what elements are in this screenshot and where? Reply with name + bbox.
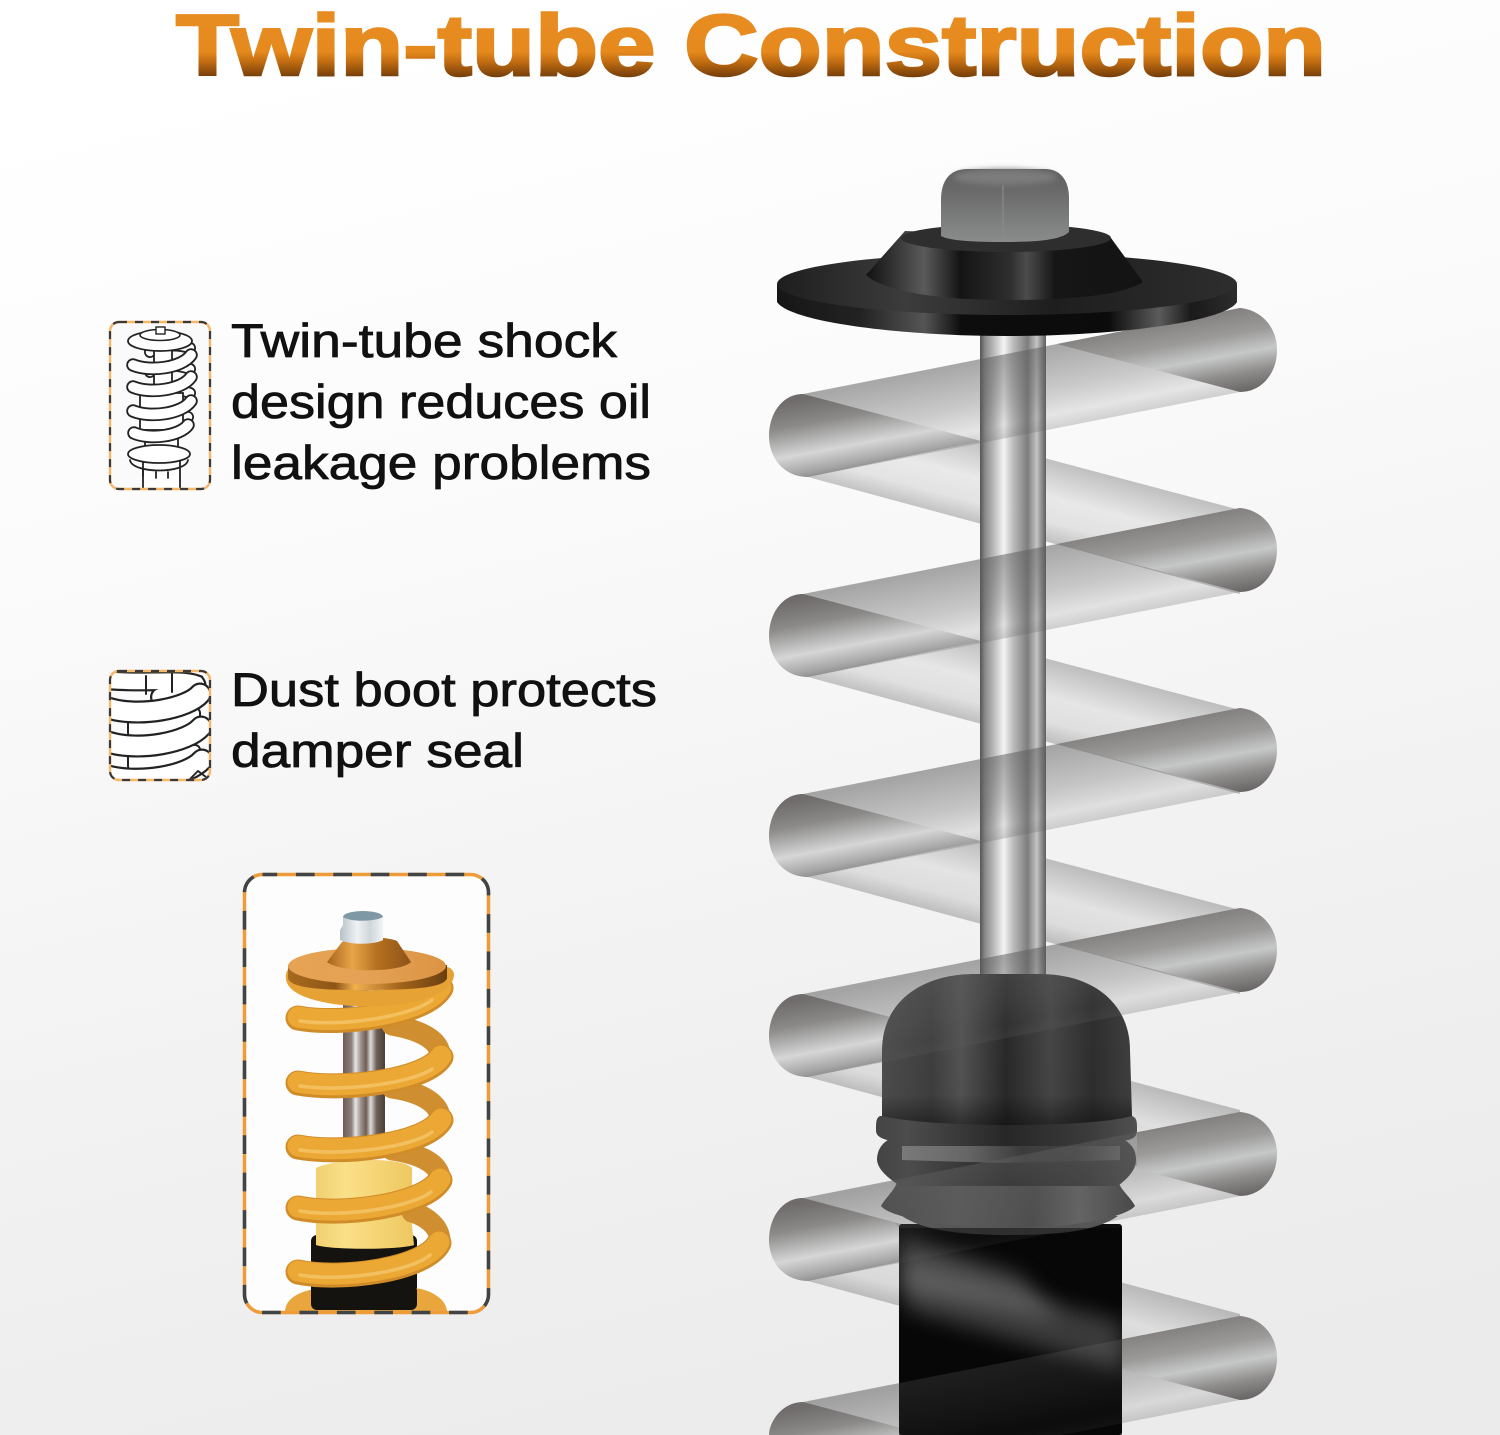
- boot upper ring: [876, 1116, 1137, 1146]
- spring: rear coil bands: [803, 394, 1240, 1435]
- chrome piston rod: [343, 990, 385, 1138]
- light groove: [902, 1146, 1120, 1163]
- text: twin-tube shock design: Twin-tube shock: [231, 314, 618, 367]
- main shock diagram: [769, 169, 1277, 1435]
- yellow bump stop: [316, 1160, 414, 1249]
- text: dust boot protects damper seal: damper seal: [231, 724, 524, 777]
- text: twin-tube shock design: design reduces oil: [231, 375, 651, 428]
- dust boot: [876, 974, 1137, 1235]
- spring rear sections: [392, 1025, 440, 1243]
- black lower seat: [311, 1235, 417, 1290]
- spring front coils: [298, 987, 441, 1277]
- ghost of coil through tube: [899, 1228, 1122, 1435]
- hex nut: [340, 911, 383, 944]
- spring: front coil bands: [803, 308, 1240, 1435]
- top mount plate: [777, 253, 1237, 336]
- icon: coil and boot line drawing: [105, 671, 210, 780]
- feature 2: dust boot: [105, 663, 657, 780]
- photo panel: gold coilover: [244, 874, 488, 1312]
- text: dust boot protects damper seal: [231, 663, 657, 777]
- icon: shock absorber line drawing: [110, 322, 210, 495]
- boot second bellow: [877, 1140, 1136, 1186]
- lower damper tube: [899, 1224, 1122, 1435]
- top spring ring: [294, 975, 446, 998]
- piston shaft: [980, 330, 1046, 990]
- hex bolt: [941, 169, 1069, 242]
- title: Twin-tube Construction: [176, 0, 1326, 94]
- top mount cone: [866, 224, 1143, 300]
- boot third bellow: [881, 1180, 1135, 1228]
- text: twin-tube shock design: leakage problems: [231, 436, 651, 489]
- bottom spring ring: [285, 1288, 447, 1312]
- top mount disc: [288, 965, 447, 990]
- top mount cone: [327, 937, 411, 970]
- text: twin-tube shock design: [231, 314, 651, 489]
- spring: rounded coil ends: [769, 308, 1277, 1435]
- boot lower flange: [902, 1216, 1118, 1235]
- boot dome: [882, 974, 1132, 1125]
- feature 1: twin-tube shock: [110, 314, 651, 495]
- text: dust boot protects damper seal: Dust boot protects: [231, 663, 657, 716]
